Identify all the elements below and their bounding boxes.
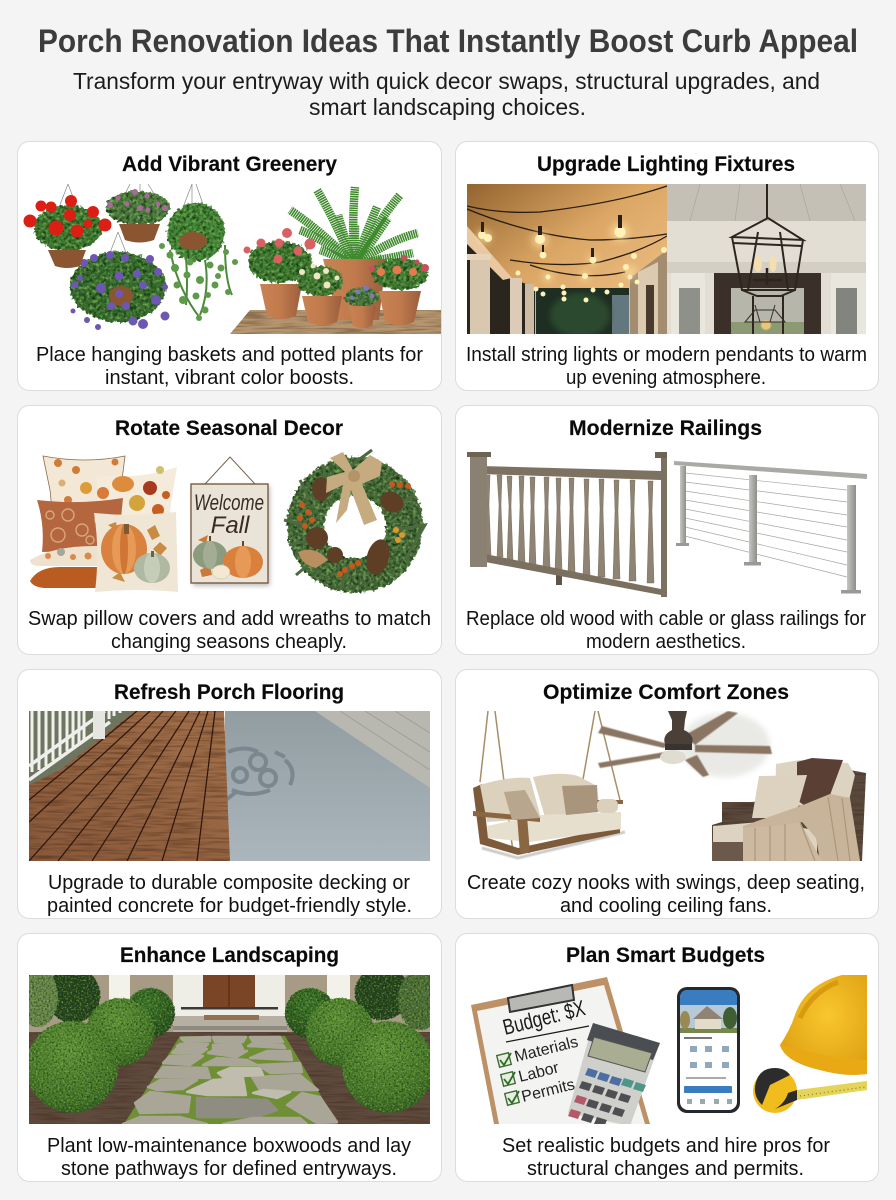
mulch bed: [29, 1032, 430, 1124]
fern plant: [290, 187, 418, 266]
image: fall pillows: [30, 456, 178, 592]
hard hat: [780, 975, 867, 1075]
potted plant: pink geranium: [244, 228, 316, 319]
stencil pattern: [226, 748, 293, 800]
house front: [29, 975, 430, 1035]
pillow: orange bottom: [30, 567, 100, 588]
checklist: [497, 1034, 580, 1106]
image: old wood railing: [467, 452, 667, 597]
path stones: [123, 1037, 337, 1124]
description: [47, 872, 412, 917]
description: structural changes and permits.: [527, 1158, 804, 1180]
sign lettering: Welcome: [194, 490, 264, 515]
swing frame: [473, 784, 620, 855]
heading: upgrade lighting fixtures: Upgrade Lighting Fixtures: [537, 152, 795, 176]
smartphone: [677, 987, 740, 1113]
panel: rotate seasonal decor: [18, 406, 442, 654]
description: Plant low-maintenance boxwoods and lay: [47, 1135, 411, 1157]
subtitle: Transform your entryway with quick decor swaps, structural upgrades, and: [73, 68, 820, 94]
heading: rotate seasonal decor: Rotate Seasonal Decor: [115, 416, 344, 440]
panel: add vibrant greenery: [18, 142, 442, 390]
tape measure: [753, 1068, 867, 1113]
photo: pendant lantern: [667, 184, 866, 334]
white porch railing: [29, 711, 135, 785]
panel: enhance landscaping: [18, 934, 442, 1182]
pine cones: [306, 477, 407, 577]
hanger wires: [58, 184, 205, 258]
image: budget tools: [471, 975, 867, 1127]
potted plant: white flowers: [297, 264, 343, 325]
seat cushions: [487, 812, 621, 842]
checklist: Permits: [520, 1076, 577, 1106]
sign lettering: Fall: [211, 512, 250, 539]
fan hub: [664, 711, 693, 744]
image: boxwoods and stone path: [29, 975, 430, 1124]
bulb glow: [477, 223, 636, 282]
description: [466, 344, 867, 389]
fan motion blur: [680, 713, 770, 777]
panel: modernize railings: [456, 406, 878, 654]
description: [28, 608, 431, 653]
burlap bow: [326, 452, 382, 525]
burlap leaves: [298, 550, 328, 568]
painted concrete floor: [225, 711, 430, 861]
wreath greenery: [287, 457, 423, 593]
front door: [203, 975, 255, 1007]
knit blanket: [743, 794, 860, 861]
image: hanging baskets and potted plants: [24, 184, 441, 334]
image: composite deck and painted concrete: [29, 711, 430, 861]
description: instant, vibrant color boosts.: [105, 367, 354, 389]
terracotta pot: large: [323, 259, 386, 320]
subtitle: [73, 68, 820, 120]
seat cushion: [713, 822, 817, 853]
app icons: [684, 1037, 729, 1079]
throw pillows: [562, 785, 598, 815]
description: painted concrete for budget-friendly style.: [47, 895, 412, 917]
ceiling fan: [598, 711, 772, 777]
description: Upgrade to durable composite decking or: [48, 872, 410, 894]
rails: [480, 466, 661, 480]
subtitle: smart landscaping choices.: [309, 94, 586, 120]
wooden deck: [230, 310, 441, 334]
brown throw: [797, 758, 843, 806]
description: Replace old wood with cable or glass railings for: [466, 608, 866, 630]
heading: plan smart budgets: Plan Smart Budgets: [566, 943, 765, 967]
description: Install string lights or modern pendants to warm: [466, 344, 867, 366]
swing arms: [473, 800, 623, 853]
description: Create cozy nooks with swings, deep seating,: [467, 872, 865, 894]
composite decking: [29, 711, 230, 861]
basket: red geraniums: [24, 195, 112, 268]
image: comfort scene: [473, 711, 866, 861]
basket: purple petunias: [70, 251, 170, 330]
heading: modernize railings: Modernize Railings: [569, 416, 762, 440]
berries: [297, 481, 411, 577]
heading: add vibrant greenery: Add Vibrant Greenery: [122, 152, 337, 176]
pillow: leaf print back: [43, 456, 125, 510]
pillow: striped flat: [30, 546, 100, 566]
pillow: rust lumbar: [37, 498, 123, 552]
backrest cushions: [480, 774, 600, 822]
pillow: pumpkins: [94, 512, 178, 592]
checklist: Labor: [517, 1059, 561, 1086]
siding wall: [315, 711, 430, 788]
description: [466, 608, 866, 653]
boxwoods middle: [86, 998, 374, 1066]
cables: [685, 473, 847, 577]
swing shadow: [482, 832, 625, 858]
description: [467, 872, 865, 917]
basket: trailing ivy: [159, 203, 238, 321]
wicker armchair: [712, 758, 866, 861]
porch swing: [473, 711, 625, 858]
checklist: Materials: [513, 1034, 580, 1066]
heading: optimize comfort zones: Optimize Comfort Zones: [543, 680, 789, 704]
photo: string lights: [467, 184, 667, 337]
description: Swap pillow covers and add wreaths to match: [28, 608, 431, 630]
pillow: leaf print front: [96, 466, 177, 550]
boxwoods back: [18, 966, 442, 1038]
description: [36, 344, 423, 389]
description: [47, 1135, 411, 1180]
heading: refresh porch flooring: Refresh Porch Flooring: [114, 680, 344, 704]
description: Place hanging baskets and potted plants for: [36, 344, 423, 366]
boxwoods front: [26, 1021, 434, 1113]
description: up evening atmosphere.: [566, 367, 766, 389]
panel: upgrade lighting fixtures: [456, 142, 878, 390]
budget heading: Budget: $X: [500, 995, 588, 1040]
ropes: [480, 711, 620, 852]
app house photo: [680, 1005, 737, 1033]
wreath needles: [284, 450, 425, 590]
deck board gaps: [29, 711, 215, 861]
clip: [508, 985, 574, 1012]
title: Porch Renovation Ideas That Instantly Boost Curb Appeal: [38, 23, 858, 59]
description: stone pathways for defined entryways.: [61, 1158, 397, 1180]
panel: optimize comfort zones: [456, 670, 878, 918]
image: cable railing: [674, 461, 867, 594]
description: changing seasons cheaply.: [111, 631, 347, 653]
potted plant: small purple: [345, 285, 379, 328]
image: welcome fall sign: [191, 457, 270, 586]
porch step: [173, 1016, 287, 1032]
posts: [680, 466, 856, 591]
clipboard: [471, 977, 650, 1124]
posts: [470, 456, 487, 567]
cream pillow: [752, 775, 807, 818]
image: autumn wreath: [284, 450, 425, 593]
description: modern aesthetics.: [586, 631, 746, 653]
potted plant: orange flowers: [369, 255, 429, 325]
back cushions: [775, 760, 855, 806]
description: [502, 1135, 830, 1180]
panel: plan smart budgets: [456, 934, 878, 1182]
heading: enhance landscaping: Enhance Landscaping: [120, 943, 339, 967]
description: Set realistic budgets and hire pros for: [502, 1135, 830, 1157]
fan blades: [598, 711, 772, 777]
panel: refresh porch flooring: [18, 670, 442, 918]
wicker frame: [712, 770, 866, 861]
basket: pink and purple flowers: [106, 189, 170, 242]
description: and cooling ceiling fans.: [560, 895, 772, 917]
image: string lights and pendant: [467, 184, 866, 337]
balusters: [485, 475, 654, 583]
sign lettering: [194, 490, 264, 539]
calculator: [568, 1023, 660, 1127]
moss path: [124, 1036, 338, 1124]
top rail: [674, 461, 867, 479]
